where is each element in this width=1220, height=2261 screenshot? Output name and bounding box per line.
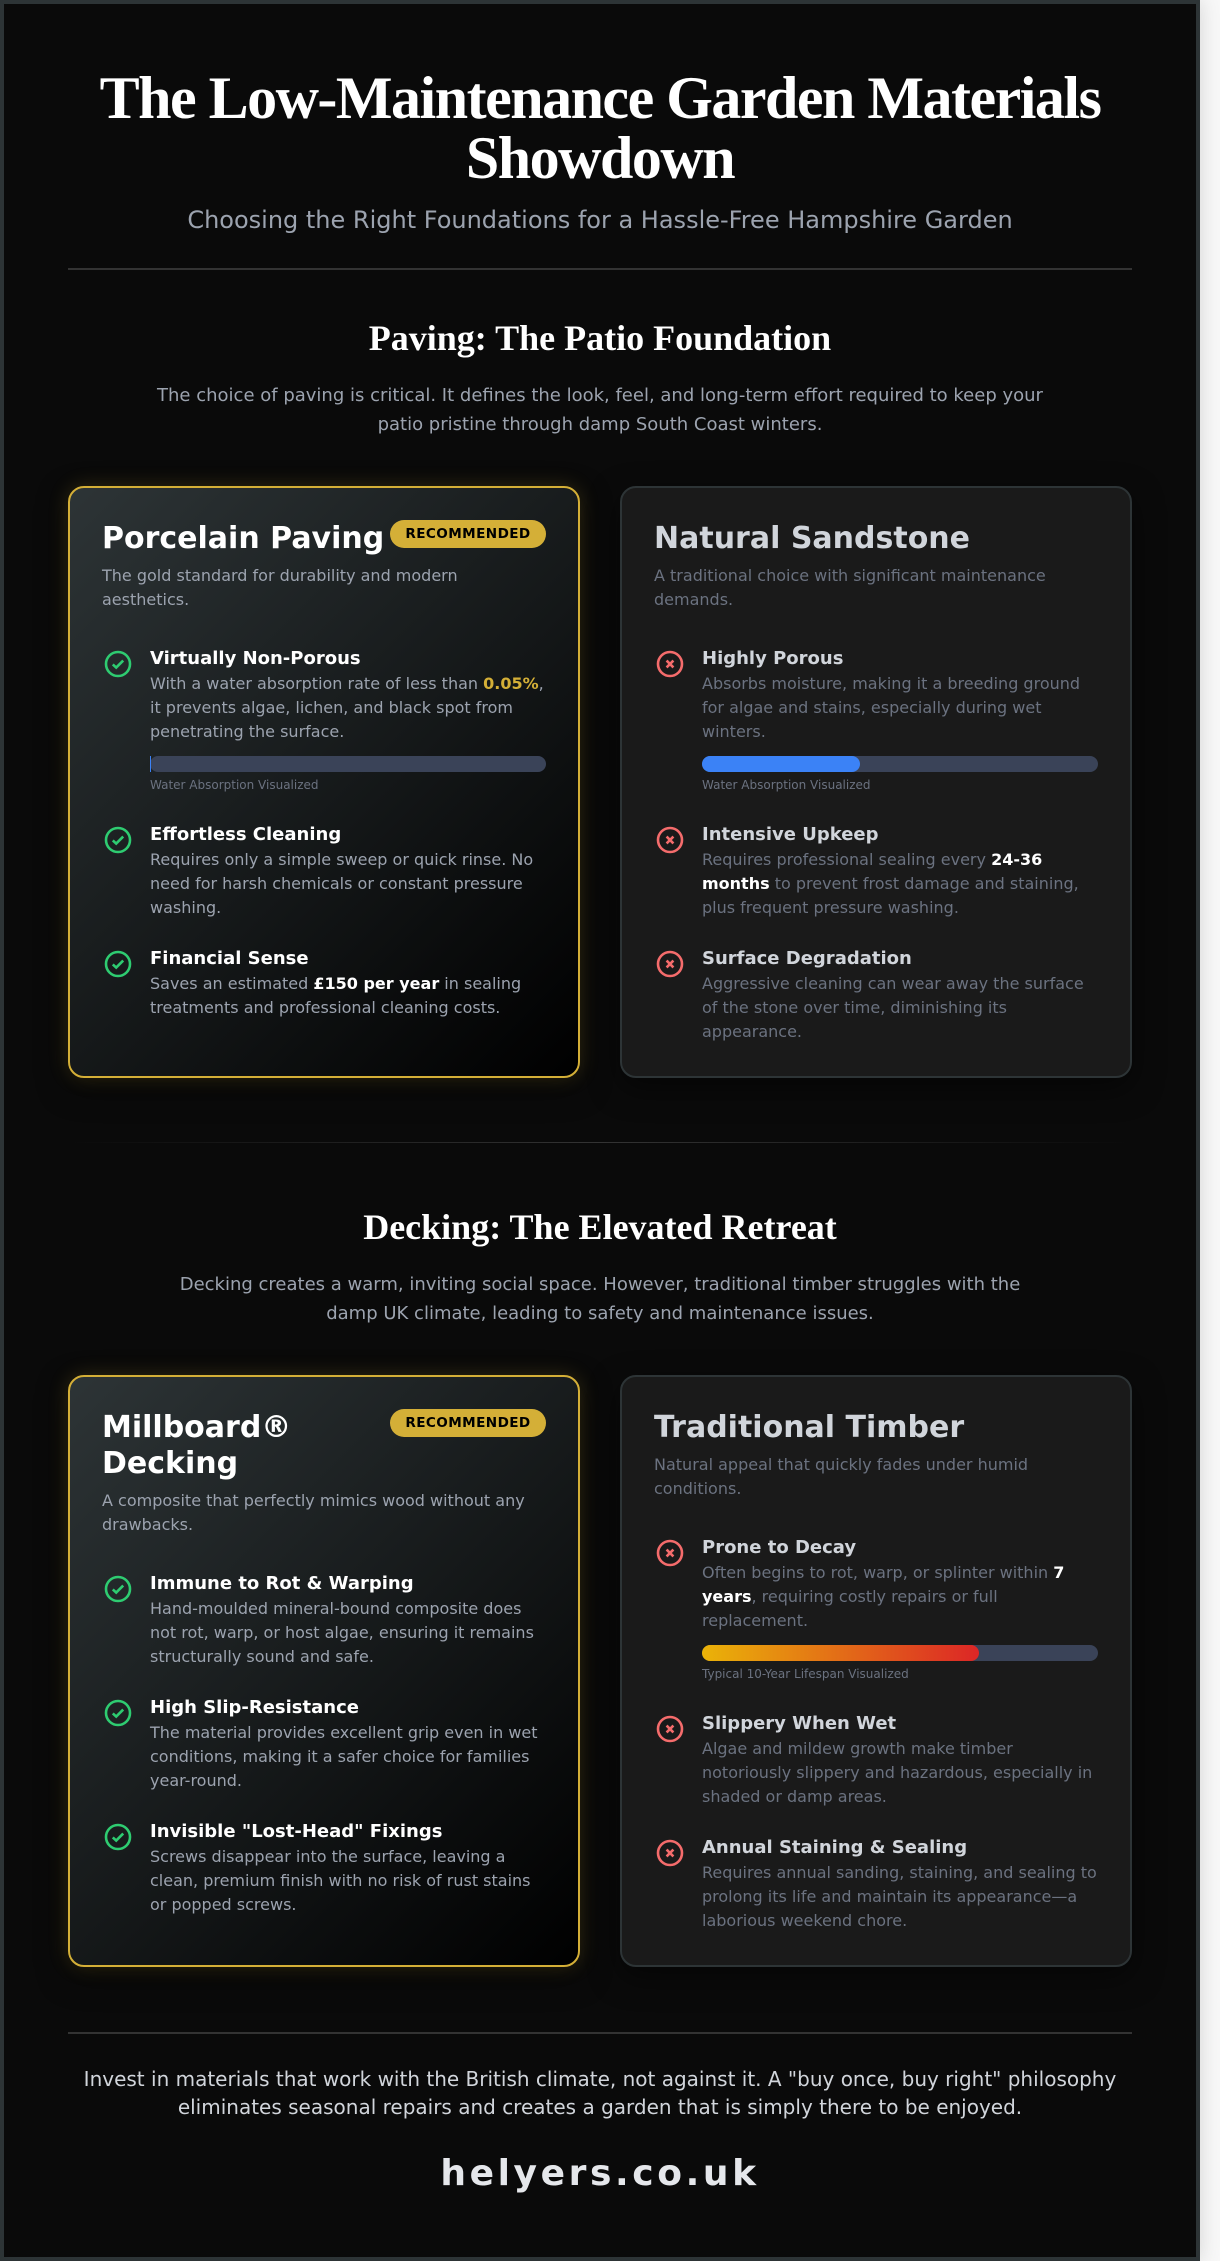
feature: virtually non-porous: [104, 648, 546, 792]
card title: Decking: [102, 1446, 238, 1481]
feature: invisible fixings: Screws disappear into the surface, leaving a clean, premium finish with no risk of rust stains or popped screws.: [150, 1847, 531, 1914]
feature: effortless cleaning: Requires only a simple sweep or quick rinse. No need for harsh chemicals or constant pressure washing.: [150, 850, 533, 917]
feature: immune to rot: [104, 1573, 534, 1666]
paving heading: Paving: The Patio Foundation: [369, 318, 831, 358]
recommended badge: [390, 1409, 546, 1437]
card title: Natural Sandstone: [654, 521, 970, 556]
icon: cross: [656, 1840, 684, 1866]
feature: effortless cleaning: [104, 824, 533, 917]
feature: surface degradation: [656, 948, 1084, 1041]
icon: check: [104, 1576, 132, 1602]
recommended badge: [390, 520, 546, 548]
feature: virtually non-porous: Virtually Non-Porous: [150, 648, 361, 669]
feature: slippery when wet: Slippery When Wet: [702, 1713, 896, 1734]
feature: prone to decay: [656, 1537, 1098, 1681]
card title: [102, 1410, 291, 1481]
card description: The gold standard for durability and modern aesthetics.: [102, 566, 458, 609]
panel: traditional timber: [620, 1375, 1132, 1967]
panel: millboard decking: [68, 1375, 580, 1967]
feature: intensive upkeep: Intensive Upkeep: [702, 824, 879, 845]
panel: natural sandstone: [620, 486, 1132, 1078]
subtitle: Choosing the Right Foundations for a Hassle-Free Hampshire Garden: [187, 206, 1013, 234]
icon: check: [104, 1700, 132, 1726]
panel: porcelain paving: [68, 486, 580, 1078]
feature: surface degradation: Aggressive cleaning can wear away the surface of the stone over time, diminishing its appearance.: [702, 974, 1084, 1041]
feature: virtually non-porous: With a water absorption rate of less than 0.05%, it prevents algae, lichen, and black spot from penetrating the surface.: [150, 674, 544, 741]
card description: A traditional choice with significant maintenance demands.: [654, 566, 1046, 609]
feature: highly porous: Highly Porous: [702, 648, 843, 669]
feature: financial sense: Financial Sense: [150, 948, 309, 969]
title: The Low-Maintenance Garden Materials: [100, 65, 1100, 131]
feature: immune to rot: Immune to Rot & Warping: [150, 1573, 414, 1594]
feature: highly porous: [656, 648, 1098, 792]
card description: Natural appeal that quickly fades under humid conditions.: [654, 1455, 1028, 1498]
feature: prone to decay: Prone to Decay: [702, 1537, 856, 1558]
recommended badge: RECOMMENDED: [405, 526, 531, 542]
card description: A composite that perfectly mimics wood without any drawbacks.: [102, 1491, 525, 1534]
feature: financial sense: [104, 948, 521, 1017]
bar caption: Typical 10-Year Lifespan Visualized: [702, 1667, 909, 1681]
title: [100, 65, 1100, 191]
card title: Traditional Timber: [654, 1410, 964, 1445]
feature: surface degradation: Surface Degradation: [702, 948, 912, 969]
icon: cross: [656, 826, 684, 854]
feature: slippery when wet: Algae and mildew growth make timber notoriously slippery and hazardous, especially in shaded or damp areas.: [702, 1739, 1092, 1806]
card title: Millboard®: [102, 1410, 291, 1445]
feature: financial sense: Saves an estimated £150 per year in sealing treatments and professional cleaning costs.: [150, 974, 521, 1017]
feature: immune to rot: Hand-moulded mineral-bound composite does not rot, warp, or host algae, ensuring it remains structurally sound and safe.: [150, 1599, 534, 1666]
footer: [84, 2067, 1116, 2194]
icon: check: [104, 1824, 132, 1850]
feature: intensive upkeep: [656, 824, 1079, 917]
closing statement: Invest in materials that work with the British climate, not against it. A "buy once, buy right" philosophy eliminates seasonal repairs and creates a garden that is simply there to be enjoyed.: [84, 2067, 1116, 2119]
water absorption bar: [150, 756, 546, 772]
section: decking: [62, 1207, 1132, 1972]
decking comparison cards: [62, 1368, 1132, 1972]
website: helyers.co.uk: [440, 2153, 760, 2194]
feature: annual staining: Annual Staining & Sealing: [702, 1837, 967, 1858]
feature: intensive upkeep: Requires professional sealing every 24-36 months to prevent frost damage and staining, plus frequent pressure washing.: [702, 850, 1079, 917]
feature: prone to decay: Often begins to rot, warp, or splinter within 7 years, requiring costly repairs or full replacement.: [702, 1563, 1064, 1630]
paving intro: The choice of paving is critical. It defines the look, feel, and long-term effort required to keep your patio pristine through damp South Coast winters.: [157, 385, 1043, 435]
icon: check: [104, 826, 132, 854]
feature: effortless cleaning: Effortless Cleaning: [150, 824, 341, 845]
decking intro: Decking creates a warm, inviting social space. However, traditional timber struggles with the damp UK climate, leading to safety and maintenance issues.: [180, 1274, 1020, 1324]
paving comparison cards: [62, 480, 1132, 1083]
bar caption: Water Absorption Visualized: [702, 778, 871, 792]
feature: high slip-resistance: The material provides excellent grip even in wet conditions, making it a safer choice for families year-round.: [150, 1723, 538, 1790]
lifespan bar: [702, 1645, 1098, 1661]
feature: slippery when wet: [656, 1713, 1092, 1806]
feature: annual staining: Requires annual sanding, staining, and sealing to prolong its life and maintain its appearance—a laborious weekend chore.: [702, 1863, 1097, 1930]
section: paving: [62, 318, 1132, 1083]
recommended badge: RECOMMENDED: [405, 1415, 531, 1431]
icon: cross: [656, 650, 684, 678]
icon: check: [104, 950, 132, 978]
decking heading: Decking: The Elevated Retreat: [363, 1207, 837, 1247]
icon: cross: [656, 1716, 684, 1742]
feature: highly porous: Absorbs moisture, making it a breeding ground for algae and stains, especially during wet winters.: [702, 674, 1080, 741]
water absorption bar: [702, 756, 1098, 772]
feature: invisible fixings: Invisible "Lost-Head" Fixings: [150, 1821, 442, 1842]
icon: cross: [656, 1540, 684, 1566]
icon: cross: [656, 950, 684, 978]
feature: high slip-resistance: High Slip-Resistance: [150, 1697, 359, 1718]
feature: invisible fixings: [104, 1821, 531, 1914]
icon: check: [104, 650, 132, 678]
feature: annual staining: [656, 1837, 1097, 1930]
feature: high slip-resistance: [104, 1697, 538, 1790]
bar caption: Water Absorption Visualized: [150, 778, 319, 792]
card title: Porcelain Paving: [102, 521, 384, 556]
title: Showdown: [466, 125, 734, 191]
